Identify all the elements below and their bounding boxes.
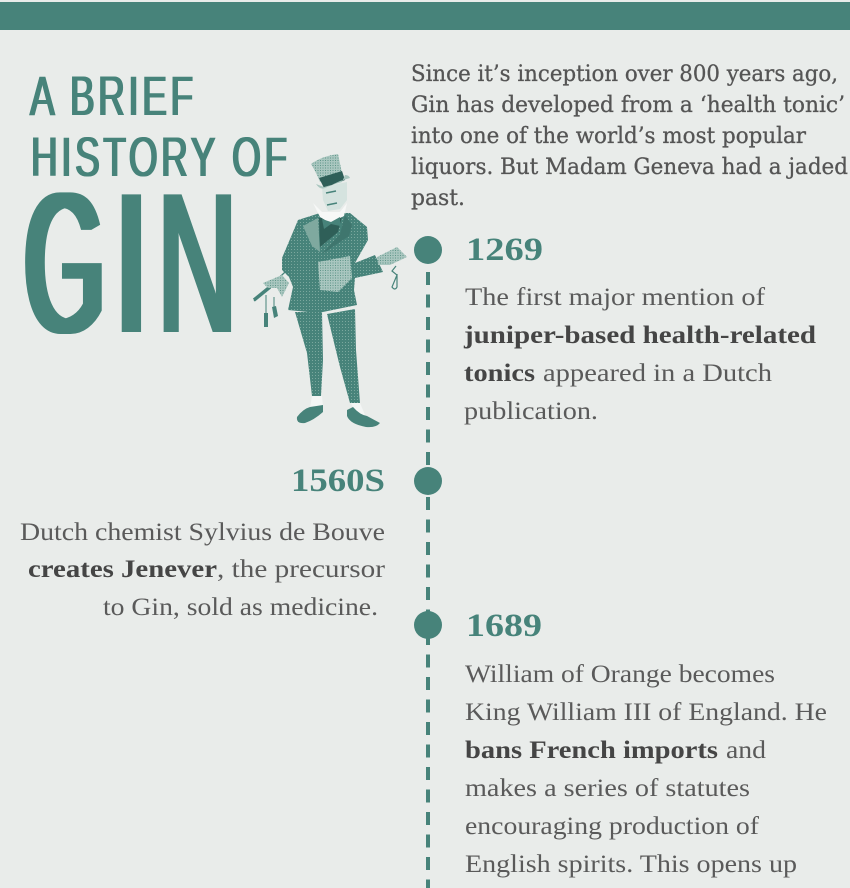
entry: 1689: William of Orange becomes [465,661,775,688]
title: N [158,152,237,375]
title [25,65,287,375]
timeline [414,236,442,888]
intro text: past. [411,186,465,211]
illustration: gentleman in top hat [254,154,407,427]
coat [282,213,383,313]
entry: 1689: bans French imports [465,737,718,764]
coat highlights [318,256,352,292]
entry: 1560s: 1560S [291,463,385,499]
entry: 1269: The first major mention of [465,284,766,311]
entry: 1560s: , the precursor [217,556,386,583]
intro text: Since it’s inception over 800 years ago, [411,62,838,87]
bow tie [322,217,340,229]
face [322,182,347,211]
entry: 1689: English spirits. This opens up [465,851,797,878]
marker: 1689 [414,611,442,639]
entry: 1560s: to Gin, sold as medicine. [103,594,378,621]
intro text: liquors. But Madam Geneva had a jaded [411,155,848,180]
left hand with cane and tassels [254,260,298,327]
entry: 1269 [463,232,816,425]
entry: 1689 [465,608,827,878]
entry: 1689: 1689 [466,608,542,644]
entry: 1689: and [726,737,767,764]
entry: 1269: 1269 [466,232,543,268]
entry: 1560s [20,463,386,621]
marker: 1560s [414,467,442,495]
entry: 1269: publication. [464,398,598,425]
title: I [118,151,145,375]
entry: 1689: King William III of England. He [465,699,827,726]
entry: 1560s: creates Jenever [28,556,217,583]
intro text [411,62,848,211]
title: G [25,151,104,375]
right hand with loop [377,247,407,289]
title: A BRIEF [30,65,193,128]
entry: 1269: juniper-based health-related [463,322,816,349]
top banner [0,2,850,30]
entry: 1689: makes a series of statutes [465,775,750,802]
entry: 1560s: Dutch chemist Sylvius de Bouve [20,519,385,546]
title: HISTORY OF [31,126,287,189]
entry: 1269: appeared in a Dutch [543,360,773,387]
marker: 1269 [414,236,442,264]
entry: 1269: tonics [464,360,535,387]
socks [310,396,323,408]
collar [313,203,347,223]
entry: 1689: encouraging production of [465,813,760,840]
legs [295,312,323,396]
top hat [311,154,342,182]
shoes [297,405,323,423]
intro text: into one of the world’s most popular [411,124,806,149]
intro text: Gin has developed from a ‘health tonic’ [411,93,845,118]
